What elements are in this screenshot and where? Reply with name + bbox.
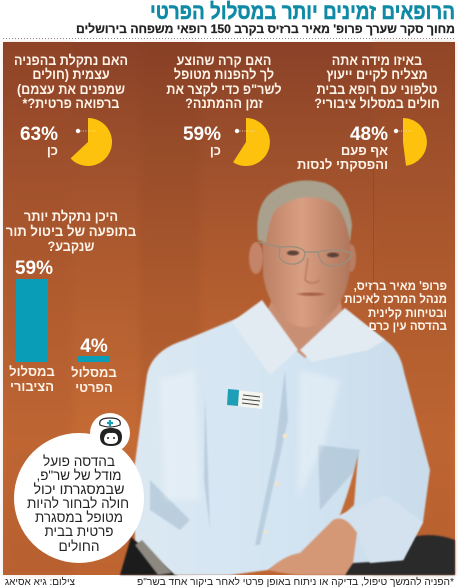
- question 1: טלפוני עם רופא בבית: [317, 81, 437, 97]
- bar chart question: היכן נתקלת יותר: [24, 208, 118, 224]
- belt buckle strip: [135, 540, 172, 575]
- buttons: [282, 434, 288, 438]
- caption: prof name: מנהל המרכז לאיכות: [344, 292, 447, 306]
- shirt cuff: [333, 495, 423, 563]
- bar chart question: שנקבע?: [48, 238, 94, 254]
- question 3: [14, 52, 128, 111]
- pie chart 48%: 48%: [350, 124, 388, 145]
- pie chart 63%: [20, 118, 112, 166]
- head: [262, 186, 350, 327]
- question 2: לך להפנות מטופל: [174, 66, 274, 82]
- question 1: באיזו מידה אתה: [332, 52, 422, 68]
- right arm gap: [338, 455, 358, 520]
- bar chart question: [6, 208, 136, 254]
- bar chart: במסלול: [71, 365, 117, 380]
- hair: [257, 180, 352, 243]
- bar chart: הפרטי: [75, 380, 113, 395]
- pie chart 59%: [183, 118, 270, 166]
- bar chart: הציבורי: [10, 379, 54, 394]
- question 3: עצמית (חולים: [32, 66, 110, 82]
- pie chart 48%: אף פעם: [341, 143, 388, 158]
- ear: [249, 242, 263, 274]
- callout bubble: מטופל במסגרת: [35, 509, 123, 525]
- callout bubble: פרטית בבית: [44, 523, 114, 539]
- subtitle: מחוך סקר שערך פרופ' מאיר ברזיס בקרב 150 רופאי משפחה בירושלים: [76, 22, 455, 36]
- question 3: שמפנים את עצמם): [17, 81, 125, 97]
- icon: nurse: [100, 418, 122, 446]
- question 1: חולים במסלול ציבורי?: [314, 95, 440, 111]
- neck: [262, 300, 345, 358]
- bar chart: [9, 258, 117, 395]
- callout bubble: החולים: [58, 538, 100, 554]
- caption: prof name: [344, 279, 447, 333]
- collar: [232, 300, 385, 375]
- question 3: ברפואה פרטית?*: [23, 95, 119, 111]
- question 2: האם קרה שהוצע: [177, 52, 271, 68]
- caption: prof name: פרופ' מאיר ברזיס,: [354, 279, 447, 293]
- glasses: [258, 242, 352, 266]
- bar chart question: בתופעה של ביטול תור: [6, 223, 136, 239]
- photo: man: [120, 180, 455, 575]
- chair: [345, 535, 455, 575]
- mouth: [296, 292, 326, 296]
- pie chart 63%: כן: [47, 143, 58, 158]
- bar chart: 4%: [80, 336, 108, 357]
- photo credit: צילום: גיא אסיאג: [5, 576, 76, 588]
- pie chart 48%: והפסקתי לנסות: [297, 157, 388, 172]
- callout bubble: מודל של שר"פ,: [36, 467, 122, 483]
- eyes: [287, 250, 299, 256]
- pie chart 48%: [297, 118, 427, 172]
- callout bubble: שבמסגרתו יכול: [34, 481, 125, 497]
- shirt shading: [150, 370, 360, 545]
- question 1: [314, 52, 440, 111]
- bar chart: 59%: [15, 258, 53, 279]
- callout bubble: חולה לבחור להיות: [27, 495, 129, 511]
- pie chart 63%: 63%: [20, 124, 58, 145]
- belt: [120, 537, 178, 575]
- name badge: [227, 389, 263, 409]
- bar chart: במסלול: [9, 364, 55, 379]
- footnote: *הפניה להמשך טיפול, בדיקה או ניתוח באופן פרטי לאחר ביקור אחד בשר"פ: [137, 576, 454, 588]
- caption: prof name: בהדסה עין כרם: [368, 319, 447, 333]
- hand and forearm: [268, 519, 357, 575]
- shirt: [134, 308, 430, 575]
- pie chart 59%: 59%: [183, 124, 221, 145]
- question 2: זמן ההמתנה?: [185, 95, 263, 111]
- callout bubble: [14, 413, 144, 563]
- question 3: האם נתקלת בהפניה: [14, 52, 128, 68]
- question 2: לשר"פ כדי לקצר את: [166, 81, 282, 97]
- callout bubble: בהדסה פועל: [43, 453, 115, 469]
- pie chart 59%: כן: [210, 143, 221, 158]
- caption: prof name: ובטיחות קלינית: [368, 306, 447, 320]
- question 2: [166, 52, 282, 111]
- question 1: מצליח לקיים ייעוץ: [326, 66, 428, 82]
